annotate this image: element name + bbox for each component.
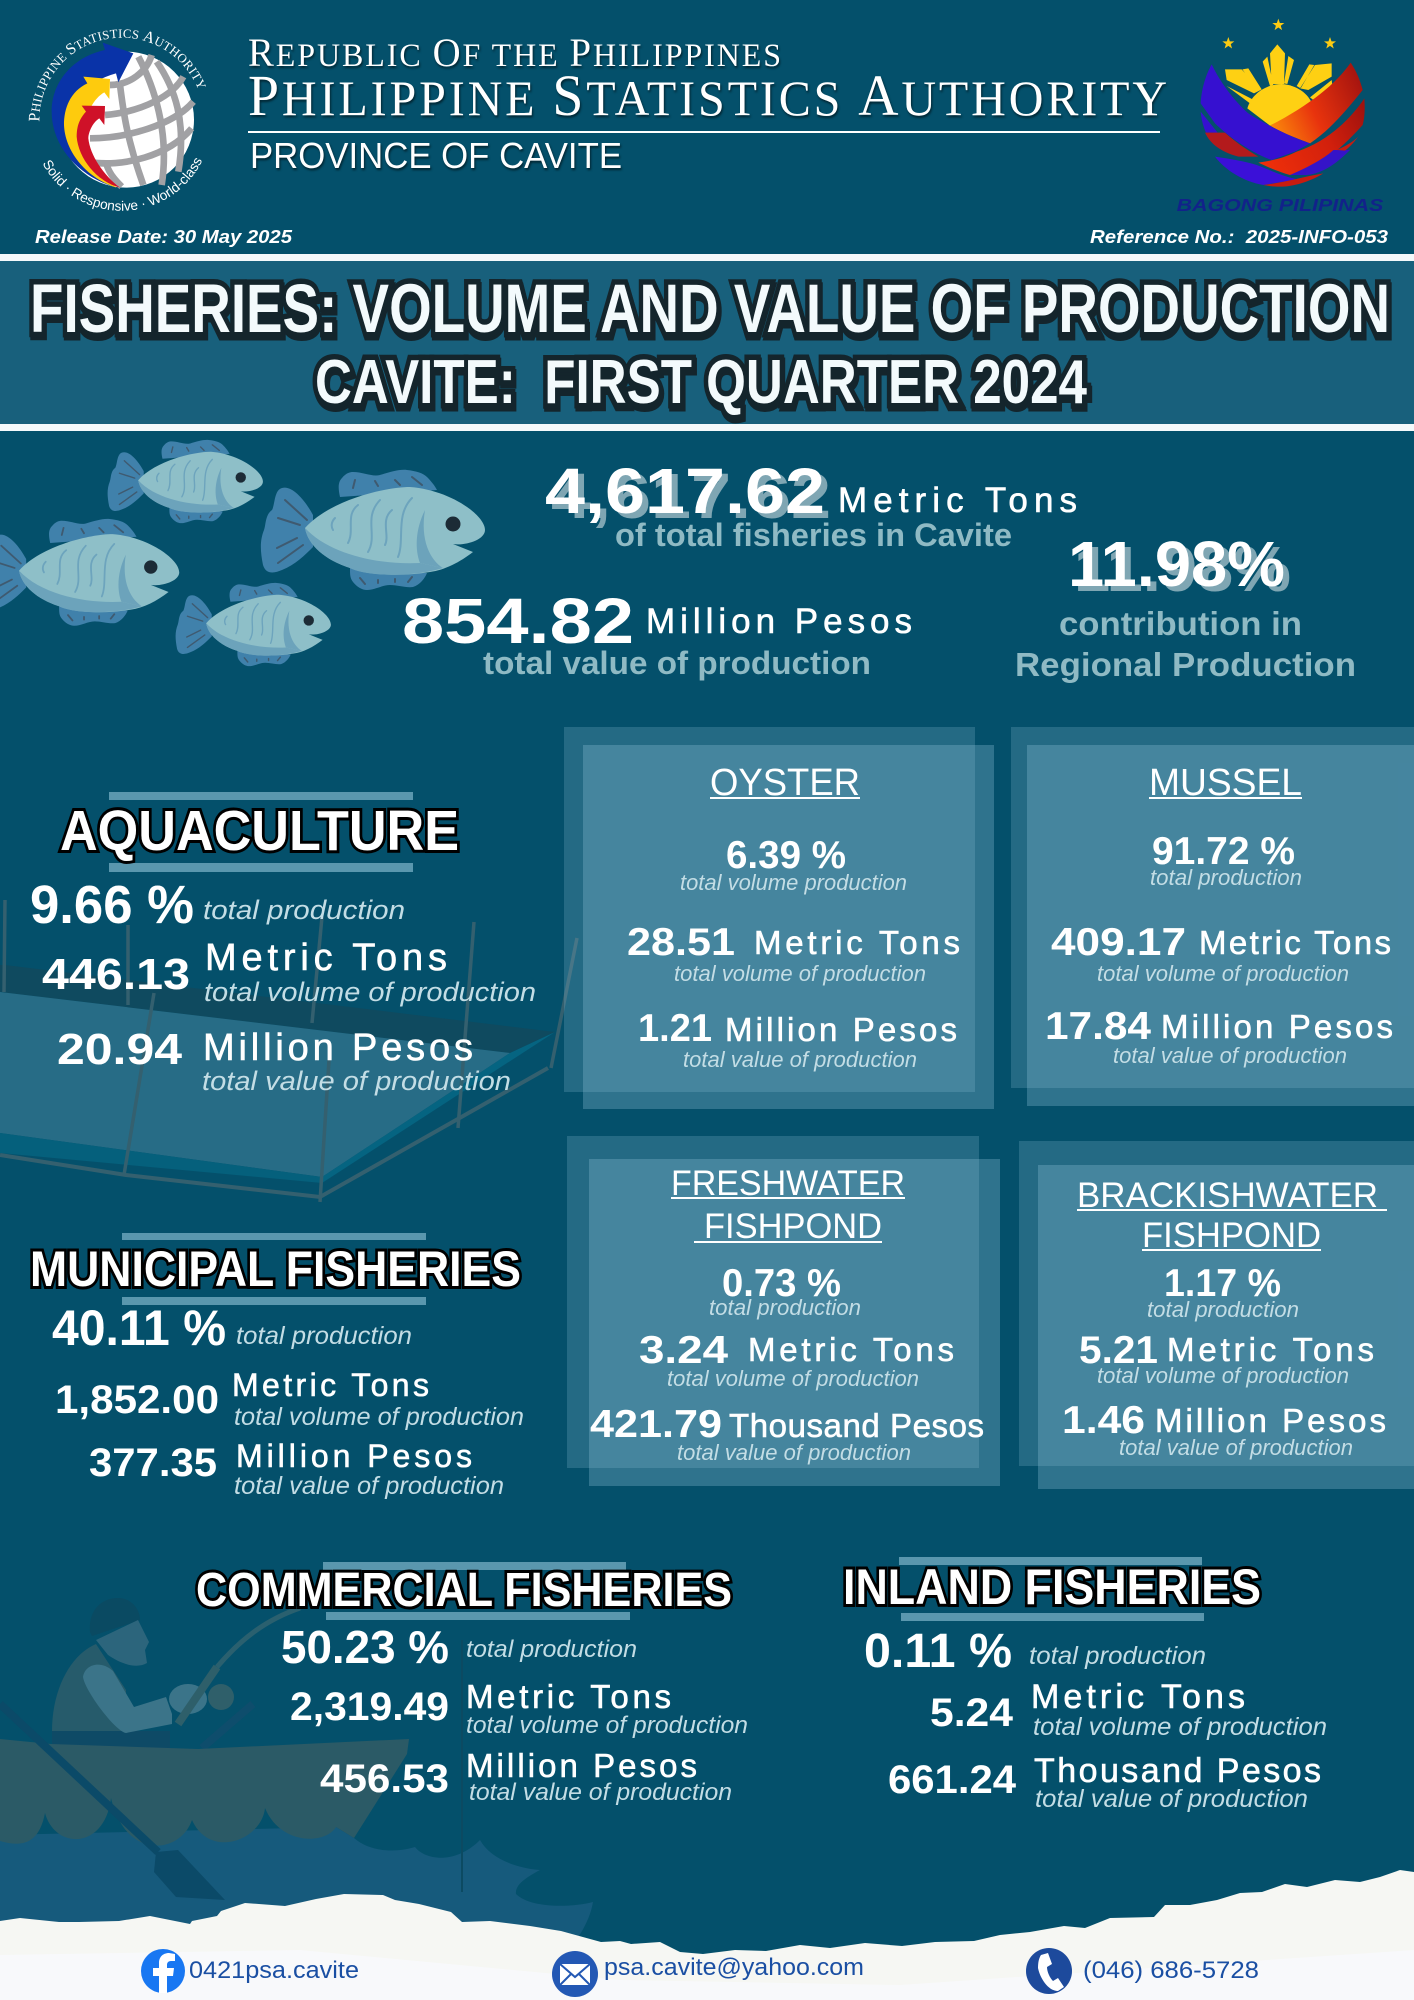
panel: inland fisheries: total value of production bbox=[1035, 1785, 1308, 1813]
panel: municipal fisheries: 40.11 % bbox=[52, 1300, 226, 1356]
panel: oyster: 28.51 bbox=[627, 921, 735, 964]
heading: aquaculture: AQUACULTURE bbox=[60, 799, 459, 863]
panel: mussel: 91.72 % bbox=[1152, 830, 1295, 873]
heading: inland fisheries: INLAND FISHERIES bbox=[843, 1559, 1261, 1615]
panel: inland fisheries: 0.11 % bbox=[864, 1625, 1012, 1678]
water bbox=[0, 1827, 593, 1950]
panel: oyster: total volume of production bbox=[674, 961, 926, 986]
panel: commercial fisheries bbox=[196, 1562, 748, 1806]
panel: mussel: 17.84 bbox=[1045, 1005, 1151, 1048]
panel: freshwater fishpond bbox=[567, 1136, 1000, 1486]
contact: email bbox=[552, 1951, 864, 1997]
panel: freshwater fishpond: 421.79 bbox=[590, 1403, 722, 1446]
hat bbox=[90, 1598, 140, 1636]
summary statistics bbox=[402, 455, 1356, 683]
contact: phone: (046) 686-5728 bbox=[1083, 1957, 1259, 1984]
contact: phone bbox=[1026, 1948, 1259, 1994]
panel: brackishwater fishpond: 1.46 bbox=[1062, 1399, 1145, 1442]
stat: total volume: 4,617.62 bbox=[545, 455, 825, 527]
panel: commercial fisheries: 2,319.49 bbox=[290, 1685, 449, 1729]
stat: regional share: Regional Production bbox=[1015, 646, 1356, 683]
stat: total value: total value of production bbox=[483, 645, 871, 681]
seal text: agency name: PHILIPPINE STATISTICS AUTHORITY bbox=[28, 29, 206, 122]
boat bbox=[0, 1739, 409, 1846]
panel: oyster: 1.21 bbox=[638, 1007, 712, 1050]
heading: mussel: MUSSEL bbox=[1149, 762, 1302, 804]
panel: municipal fisheries: Metric Tons bbox=[232, 1367, 429, 1403]
panel: brackishwater fishpond: 1.17 % bbox=[1164, 1262, 1281, 1305]
stat: total volume: Metric Tons bbox=[838, 481, 1077, 520]
illustration: fish pen background bbox=[0, 900, 577, 1202]
panel: brackishwater fishpond: Million Pesos bbox=[1155, 1402, 1386, 1439]
panel: freshwater fishpond: total value of production bbox=[677, 1440, 911, 1465]
heading: brackishwater fishpond bbox=[1077, 1176, 1387, 1255]
contact: facebook: 0421psa.cavite bbox=[189, 1957, 359, 1984]
panel: freshwater fishpond: total production bbox=[709, 1295, 861, 1320]
panel: aquaculture: total value of production bbox=[202, 1066, 511, 1096]
panel: aquaculture: Metric Tons bbox=[205, 937, 447, 979]
heading: municipal fisheries: MUNICIPAL FISHERIES bbox=[30, 1241, 521, 1297]
panel: inland fisheries: Thousand Pesos bbox=[1034, 1752, 1321, 1790]
panel: inland fisheries: total production bbox=[1029, 1642, 1206, 1670]
panel: aquaculture bbox=[30, 792, 536, 1096]
stat: regional share bbox=[1015, 528, 1356, 683]
panel: mussel: total volume of production bbox=[1097, 961, 1349, 986]
heading: Republic of the Philippines: REPUBLIC OF THE PHILIPPINES bbox=[248, 30, 783, 75]
panel: municipal fisheries: total volume of production bbox=[234, 1403, 524, 1431]
stat: total volume bbox=[545, 455, 1077, 553]
panel: freshwater fishpond: Thousand Pesos bbox=[729, 1407, 984, 1444]
panel: mussel: total value of production bbox=[1113, 1043, 1347, 1068]
panel: municipal fisheries: total production bbox=[236, 1322, 412, 1350]
divider line bbox=[248, 131, 1160, 133]
contact: facebook bbox=[141, 1949, 359, 1993]
stat: total value: Million Pesos bbox=[646, 602, 912, 641]
heading: Philippine Statistics Authority: PHILIPPINE STATISTICS AUTHORITY bbox=[248, 63, 1170, 128]
panel: freshwater fishpond: total volume of production bbox=[667, 1366, 919, 1391]
panel: brackishwater fishpond: Metric Tons bbox=[1167, 1331, 1374, 1368]
header band bbox=[28, 18, 1388, 247]
panel: inland fisheries bbox=[843, 1557, 1327, 1813]
stat: total value: 854.82 bbox=[402, 585, 634, 657]
panel: aquaculture: 9.66 % bbox=[30, 875, 194, 935]
heading: brackishwater fishpond: FISHPOND bbox=[1142, 1216, 1321, 1255]
panel: commercial fisheries: total value of production bbox=[469, 1779, 732, 1806]
panel: brackishwater fishpond: total value of production bbox=[1119, 1435, 1353, 1460]
footer: torn paper with contacts bbox=[0, 1870, 1414, 2000]
stat: regional share: 11.98% bbox=[1068, 528, 1285, 600]
stat: total value bbox=[402, 585, 912, 681]
panel: aquaculture: Million Pesos bbox=[203, 1027, 473, 1069]
heading: freshwater fishpond: FISHPOND bbox=[704, 1207, 882, 1246]
stat: regional share: contribution in bbox=[1059, 605, 1302, 642]
heading: freshwater fishpond bbox=[671, 1164, 905, 1246]
panel: commercial fisheries: 50.23 % bbox=[281, 1621, 449, 1673]
panel: freshwater fishpond: Metric Tons bbox=[748, 1331, 954, 1368]
panel: aquaculture: 446.13 bbox=[42, 950, 190, 999]
heading: brackishwater fishpond: BRACKISHWATER bbox=[1077, 1176, 1378, 1215]
face and beard bbox=[96, 1620, 149, 1666]
panel: inland fisheries: total volume of production bbox=[1033, 1713, 1327, 1741]
panel: commercial fisheries: Million Pesos bbox=[466, 1747, 697, 1784]
pants bbox=[52, 1731, 170, 1750]
panel: mussel: 409.17 bbox=[1051, 921, 1186, 964]
paddle bbox=[0, 1704, 158, 1852]
heading: freshwater fishpond: FRESHWATER bbox=[671, 1164, 905, 1203]
panel: aquaculture: total volume of production bbox=[204, 977, 536, 1007]
fishing rod bbox=[178, 1667, 217, 1724]
panel: municipal fisheries bbox=[30, 1233, 524, 1500]
panel: freshwater fishpond: 0.73 % bbox=[722, 1262, 841, 1305]
panel: oyster bbox=[564, 727, 994, 1109]
panel: commercial fisheries: Metric Tons bbox=[466, 1678, 671, 1715]
panel: brackishwater fishpond: total production bbox=[1147, 1297, 1299, 1322]
icon: school of fish bbox=[0, 440, 485, 666]
panel: municipal fisheries: total value of production bbox=[234, 1472, 504, 1500]
panel: oyster: total value of production bbox=[683, 1047, 917, 1072]
heading: Province of Cavite: PROVINCE OF CAVITE bbox=[250, 135, 622, 176]
title band bbox=[0, 254, 1414, 431]
panel: brackishwater fishpond: 5.21 bbox=[1079, 1329, 1158, 1372]
panel: commercial fisheries: total production bbox=[466, 1636, 637, 1663]
hand bbox=[169, 1684, 207, 1714]
panel: inland fisheries: 5.24 bbox=[930, 1691, 1014, 1735]
panel: brackishwater fishpond: total volume of production bbox=[1097, 1363, 1349, 1388]
panel: oyster: 6.39 % bbox=[726, 834, 846, 877]
panel: inland fisheries: Metric Tons bbox=[1031, 1678, 1245, 1716]
logo: Bagong Pilipinas bbox=[1177, 19, 1383, 215]
panel: commercial fisheries: total volume of production bbox=[466, 1712, 748, 1739]
panel: aquaculture: total production bbox=[203, 895, 405, 925]
panel: oyster: Million Pesos bbox=[725, 1011, 957, 1048]
panel: mussel: Million Pesos bbox=[1161, 1008, 1393, 1045]
panel: municipal fisheries: Million Pesos bbox=[236, 1438, 472, 1474]
heading: oyster: OYSTER bbox=[710, 762, 860, 804]
panel: oyster: Metric Tons bbox=[754, 924, 960, 961]
panel: mussel: total production bbox=[1150, 865, 1302, 890]
release date: Release Date: 30 May 2025 bbox=[35, 227, 293, 247]
panel: aquaculture: 20.94 bbox=[57, 1025, 183, 1074]
panel: municipal fisheries: 377.35 bbox=[89, 1441, 217, 1485]
heading: commercial fisheries: COMMERCIAL FISHERIES bbox=[196, 1564, 732, 1617]
panel: oyster: total volume production bbox=[680, 870, 907, 895]
panel: mussel: Metric Tons bbox=[1199, 924, 1391, 961]
panel: commercial fisheries: 456.53 bbox=[320, 1757, 449, 1801]
illustration: fisherman in boat background bbox=[0, 1598, 593, 1950]
panel: municipal fisheries: 1,852.00 bbox=[55, 1378, 219, 1422]
arm bbox=[83, 1665, 172, 1733]
panel: inland fisheries: 661.24 bbox=[888, 1758, 1017, 1802]
stat: total volume: of total fisheries in Cavite bbox=[615, 517, 1012, 553]
panel: brackishwater fishpond bbox=[1019, 1141, 1414, 1489]
title line 2: CAVITE: FIRST QUARTER 2024 bbox=[315, 348, 1087, 417]
vest bbox=[52, 1644, 126, 1731]
logo: Philippine Statistics Authority seal bbox=[28, 29, 206, 211]
seal text: motto: Solid · Responsive · World-class bbox=[44, 158, 202, 211]
reference number: Reference No.: 2025-INFO-053 bbox=[1090, 227, 1388, 247]
panel: mussel bbox=[1011, 727, 1414, 1106]
panel: freshwater fishpond: 3.24 bbox=[639, 1329, 728, 1372]
contact: email: psa.cavite@yahoo.com bbox=[604, 1954, 864, 1981]
logo text: BAGONG PILIPINAS bbox=[1177, 195, 1383, 215]
